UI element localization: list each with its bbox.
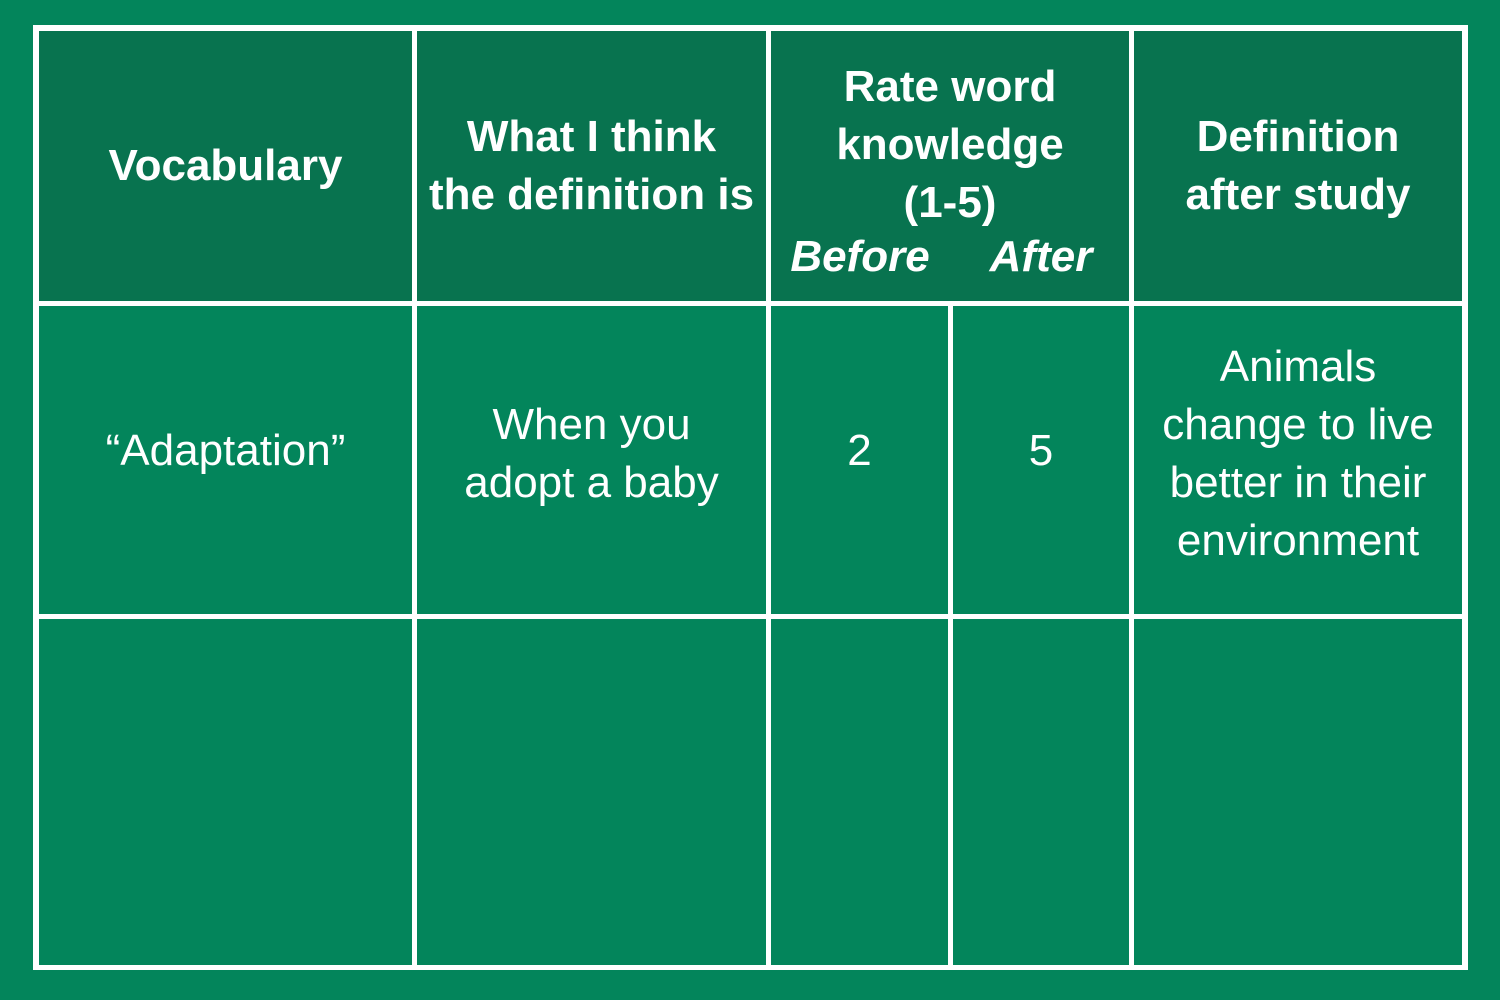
header row background [37,29,1465,303]
cell: When you adopt a baby: adopt a baby [464,458,719,507]
header: Rate word knowledge: knowledge [836,120,1064,169]
cell: When you adopt a baby [464,400,719,507]
header: Rate word knowledge: (1-5) [904,178,996,227]
header: Before: Before [790,232,930,281]
header: After: After [990,232,1092,281]
cell: definition after study: Animals [1220,342,1376,391]
header: What I think the definition is: the definition is [429,170,754,219]
cell: Adaptation: “Adaptation” [106,426,345,475]
header: Rate word knowledge: Rate word [844,62,1056,111]
cell: definition after study [1162,342,1434,565]
cell: When you adopt a baby: When you [492,400,691,449]
header: Vocabulary: Vocabulary [109,141,342,190]
header: Definition after study [1186,112,1410,219]
cell: before rating 2: 2 [847,426,872,475]
header: Definition after study: Definition [1197,112,1399,161]
header: What I think the definition is: What I think [467,112,716,161]
header: Definition after study: after study [1186,170,1410,219]
cell: definition after study: better in their [1170,458,1426,507]
cell: after rating 5: 5 [1029,426,1053,475]
header: Rate word knowledge [836,62,1064,227]
cell: definition after study: change to live [1162,400,1434,449]
cell: definition after study: environment [1177,516,1419,565]
header: What I think the definition is [429,112,754,219]
